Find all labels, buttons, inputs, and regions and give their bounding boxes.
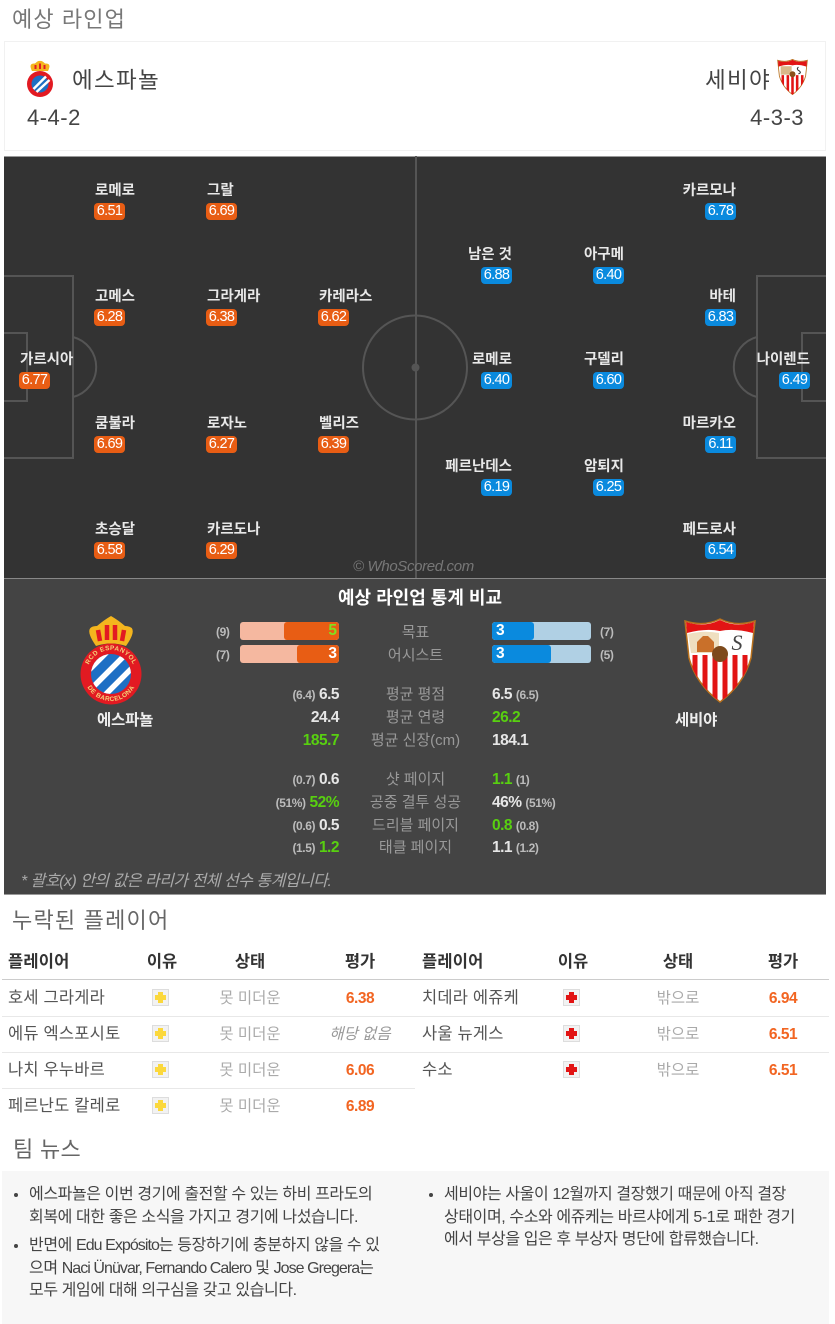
player: 카르도나 xyxy=(206,521,260,559)
player: 가르시아 xyxy=(19,351,74,389)
player: 그라게라 xyxy=(206,288,260,326)
player: 암퇴지: 6.25 xyxy=(596,479,621,495)
row: 페르난도 칼레로: 6.89 xyxy=(346,1098,374,1115)
label: 어시스트: 어시스트 xyxy=(388,647,443,664)
table header: 상태 xyxy=(235,953,265,971)
player: 페드로사 xyxy=(683,521,736,559)
player: 카르모나: 카르모나 xyxy=(683,183,736,199)
news: Sevilla bullet: 에서 부상을 입은 후 부상자 명단에 합류했습니다. xyxy=(444,1231,759,1248)
player: 아구메: 아구메 xyxy=(584,247,624,263)
icon: Sevilla crest small xyxy=(777,59,808,95)
value: away rating: 6.5 (6.5) xyxy=(492,686,539,703)
bar: home goals: 5 xyxy=(328,622,337,639)
value: home shots: (0.7) 0.6 xyxy=(292,771,339,788)
player: 가르시아: 6.77 xyxy=(22,372,47,388)
value: away aerials: 46% (51%) xyxy=(492,794,555,811)
row: 에듀 엑스포시토 xyxy=(8,1017,415,1053)
heading: 팀 뉴스: 팀 뉴스 xyxy=(13,1137,81,1162)
table header: 상태 xyxy=(663,953,693,971)
row: 수소: 밖으로 xyxy=(657,1062,699,1079)
player: 카르도나: 카르도나 xyxy=(207,522,260,538)
panel: pitch xyxy=(4,156,826,578)
formation: 4-3-3: 4-3-3 xyxy=(750,105,804,130)
totals: assists away: (5) xyxy=(600,648,613,662)
player: 쿰불라: 쿰불라 xyxy=(95,416,135,432)
pitch markings xyxy=(4,156,826,578)
value: away shots: 1.1 (1) xyxy=(492,771,529,788)
player: 남은 것: 남은 것 xyxy=(468,247,512,263)
player: 고메스: 고메스 xyxy=(95,289,135,305)
player: 벨리즈 xyxy=(318,415,359,453)
row: 치데라 에쥬케 xyxy=(422,981,829,1017)
news: Espanyol first bullet xyxy=(29,1184,372,1229)
stat row: 어시스트 xyxy=(240,645,591,663)
player: 바테: 6.83 xyxy=(708,309,733,325)
player: 카르도나: 6.29 xyxy=(209,542,234,558)
icon: Espanyol crest large xyxy=(80,616,142,704)
player: 남은 것: 6.88 xyxy=(484,267,509,283)
player: 아구메: 6.40 xyxy=(596,267,621,283)
row: 호세 그라게라: 6.38 xyxy=(346,990,374,1007)
label: 평균 평점: 평균 평점 xyxy=(386,686,445,703)
player: 그라게라: 6.38 xyxy=(209,309,234,325)
player: 나이렌드: 6.49 xyxy=(782,372,807,388)
table header xyxy=(2,950,415,980)
label: 샷 페이지: 샷 페이지 xyxy=(386,771,445,788)
heading: stats comparison: 예상 라인업 통계 비교 xyxy=(338,588,502,608)
player: 페드로사: 페드로사 xyxy=(683,522,736,538)
player: 벨리즈: 벨리즈 xyxy=(319,416,359,432)
player: 구델리: 6.60 xyxy=(596,372,621,388)
table header: 이유 xyxy=(147,953,177,971)
icon: Espanyol crest large: DE BARCELONA xyxy=(88,685,134,702)
panel: team header xyxy=(4,41,826,151)
row: 사울 뉴게스: 6.51 xyxy=(769,1026,797,1043)
player: 고메스: 6.28 xyxy=(97,309,122,325)
player: 마르카오: 6.11 xyxy=(708,436,733,452)
row: 호세 그라게라: 호세 그라게라 xyxy=(8,989,105,1007)
row: 나치 우누바르: 나치 우누바르 xyxy=(8,1061,105,1079)
label: 평균 연령: 평균 연령 xyxy=(386,709,445,726)
player: 나이렌드 xyxy=(757,351,810,389)
row: 에듀 엑스포시토: 해당 없음 xyxy=(329,1026,391,1043)
player: 로메로: 로메로 xyxy=(95,183,135,199)
row: 치데라 에쥬케: 밖으로 xyxy=(657,990,699,1007)
bar: away goals: 3 xyxy=(496,622,505,639)
label: 공중 결투 성공: 공중 결투 성공 xyxy=(370,794,461,811)
player: 로메로 xyxy=(472,352,512,389)
news: Espanyol first bullet: 회복에 대한 좋은 소식을 가지고 경기에 나섰습니다. xyxy=(29,1208,358,1226)
player: 로자노: 로자노 xyxy=(207,416,247,432)
player: 벨리즈: 6.39 xyxy=(321,436,346,452)
player: 쿰불라: 6.69 xyxy=(97,436,122,452)
player: 암퇴지: 암퇴지 xyxy=(584,459,624,475)
bar: home assists xyxy=(240,645,339,663)
news: Espanyol second bullet: 으며 Naci Ünüvar, Fernando Calero 및 Jose Gregera는 xyxy=(29,1260,374,1276)
bar: home assists: 3 xyxy=(328,645,337,662)
news: Espanyol second bullet xyxy=(29,1235,380,1302)
value: away age: 26.2 xyxy=(492,709,520,726)
value: away tackles: 1.1 (1.2) xyxy=(492,839,539,856)
player: 구델리 xyxy=(584,351,624,389)
label: 드리블 페이지: 드리블 페이지 xyxy=(372,817,459,834)
icon: Espanyol crest large: RCD ESPANYOL xyxy=(85,645,136,664)
team label: 세비야: 세비야 xyxy=(675,712,717,729)
player: 가르시아: 가르시아 xyxy=(20,352,73,368)
value: away dribbles: 0.8 (0.8) xyxy=(492,817,539,834)
player: 암퇴지 xyxy=(584,458,624,496)
row: 나치 우누바르: 6.06 xyxy=(346,1062,374,1079)
player: 카레라스 xyxy=(318,288,372,326)
player: 로메로: 6.51 xyxy=(97,203,122,219)
table header: 이유 xyxy=(558,953,588,971)
row: 치데라 에쥬케: 6.94 xyxy=(769,990,797,1007)
player: 카레라스: 카레라스 xyxy=(319,289,372,305)
row: 사울 뉴게스 xyxy=(422,1017,829,1053)
heading: 누락된 플레이어: 누락된 플레이어 xyxy=(12,908,169,933)
bar: away goals xyxy=(492,622,591,640)
player: 나이렌드: 나이렌드 xyxy=(757,352,810,368)
player: 페르난데스: 6.19 xyxy=(484,479,509,495)
row: 페르난도 칼레로 xyxy=(8,1089,415,1125)
news: Sevilla bullet: 상태이며, 수소와 에쥬케는 바르샤에게 5-1로 패한 경기 xyxy=(444,1208,795,1226)
player: 바테 xyxy=(705,288,736,326)
player: 카르모나 xyxy=(683,182,736,220)
player: 페드로사: 6.54 xyxy=(708,542,733,558)
player: 로메로 xyxy=(94,182,135,220)
value: home tackles: (1.5) 1.2 xyxy=(292,839,339,856)
row: 에듀 엑스포시토: 못 미더운 xyxy=(219,1026,281,1043)
team name: 세비야: 세비야 xyxy=(705,68,771,93)
player: 남은 것 xyxy=(468,246,512,284)
row: 호세 그라게라 xyxy=(8,981,415,1017)
player: 카레라스: 6.62 xyxy=(321,309,346,325)
player: 로메로: 로메로 xyxy=(472,352,512,368)
value: home aerials: (51%) 52% xyxy=(276,794,339,811)
news: Sevilla bullet xyxy=(444,1184,795,1252)
news: Espanyol second bullet: 모두 게임에 대해 의구심을 갖고 있습니다. xyxy=(29,1282,297,1299)
watermark: © WhoScored.com xyxy=(353,558,474,575)
bar: away assists: 3 xyxy=(496,645,505,662)
table header: 평가 xyxy=(768,953,798,971)
player: 고메스 xyxy=(94,288,135,326)
formation: 4-4-2: 4-4-2 xyxy=(27,105,81,130)
table header: 플레이어 xyxy=(422,953,484,971)
player: 페르난데스 xyxy=(445,458,512,496)
player: 초승달 xyxy=(94,521,135,559)
panel: team news xyxy=(2,1171,829,1324)
row: 나치 우누바르: 못 미더운 xyxy=(219,1062,281,1079)
label: 목표: 목표 xyxy=(402,624,429,641)
row: 수소: 6.51 xyxy=(769,1062,797,1079)
label: 평균 신장: 평균 신장(cm) xyxy=(371,732,460,749)
team label: 에스파뇰: 에스파뇰 xyxy=(97,712,153,729)
icon: Sevilla crest large xyxy=(684,618,756,703)
row: 수소: 수소 xyxy=(422,1061,453,1079)
totals: assists home: (7) xyxy=(216,648,229,662)
row: 치데라 에쥬케: 치데라 에쥬케 xyxy=(422,989,519,1007)
news: Sevilla bullet: 세비야는 사울이 12월까지 결장했기 때문에 아직 결장 xyxy=(444,1186,786,1203)
row: 호세 그라게라: 못 미더운 xyxy=(219,990,281,1007)
value: home age: 24.4 xyxy=(311,709,339,726)
label: 태클 페이지: 태클 페이지 xyxy=(379,839,452,856)
news: Espanyol second bullet: 반면에 Edu Expósito는 등장하기에 충분하지 않을 수 있 xyxy=(29,1237,380,1254)
player: 카르모나: 6.78 xyxy=(708,203,733,219)
player: 로자노 xyxy=(206,416,247,453)
table header xyxy=(415,950,829,980)
player: 그랄: 6.69 xyxy=(209,203,234,219)
player: 마르카오: 마르카오 xyxy=(683,416,736,432)
totals: goals away: (7) xyxy=(600,625,613,639)
value: home rating: (6.4) 6.5 xyxy=(292,686,339,703)
news: Espanyol first bullet: 에스파뇰은 이번 경기에 출전할 수 있는 하비 프라도의 xyxy=(29,1186,372,1203)
player: 쿰불라 xyxy=(94,415,135,453)
row: 페르난도 칼레로: 못 미더운 xyxy=(219,1098,281,1115)
player: 구델리: 구델리 xyxy=(584,352,624,368)
bar: home goals xyxy=(240,622,339,640)
footnote: * 괄호(x) 안의 값은 라리가 전체 선수 통계입니다. xyxy=(21,873,331,890)
player: 로자노: 6.27 xyxy=(209,436,234,452)
stat row: 목표 xyxy=(240,622,591,640)
table: missing players away xyxy=(415,950,829,1088)
row: 사울 뉴게스: 밖으로 xyxy=(657,1026,699,1043)
value: away height: 184.1 xyxy=(492,732,528,749)
value: home height: 185.7 xyxy=(303,732,339,749)
player: 그라게라: 그라게라 xyxy=(207,289,260,305)
totals: goals home: (9) xyxy=(216,625,229,639)
panel: lineup stats comparison xyxy=(4,578,826,895)
row: 나치 우누바르 xyxy=(8,1053,415,1089)
value: home dribbles: (0.6) 0.5 xyxy=(292,817,339,834)
icon: Espanyol crest small xyxy=(27,60,53,97)
player: 로메로: 6.40 xyxy=(484,372,509,388)
row: 페르난도 칼레로: 페르난도 칼레로 xyxy=(8,1097,120,1115)
icon: Sevilla crest large: S xyxy=(732,630,742,655)
row: 사울 뉴게스: 사울 뉴게스 xyxy=(422,1025,504,1043)
bar: away assists xyxy=(492,645,591,663)
player: 초승달: 초승달 xyxy=(95,522,135,538)
team name: 에스파뇰: 에스파뇰 xyxy=(72,68,160,93)
table header: 플레이어 xyxy=(8,953,70,971)
player: 바테: 바테 xyxy=(709,289,736,305)
row: 에듀 엑스포시토: 에듀 엑스포시토 xyxy=(8,1025,120,1043)
table: missing players home xyxy=(2,950,415,1124)
player: 마르카오 xyxy=(683,415,736,453)
heading: 예상 라인업: 예상 라인업 xyxy=(12,7,126,32)
row: 수소 xyxy=(422,1053,829,1089)
player: 그랄: 그랄 xyxy=(207,183,234,199)
player: 초승달: 6.58 xyxy=(97,542,122,558)
player: 아구메 xyxy=(584,246,624,284)
table header: 평가 xyxy=(345,953,375,971)
player: 그랄 xyxy=(206,182,237,220)
player: 페르난데스: 페르난데스 xyxy=(445,459,512,475)
